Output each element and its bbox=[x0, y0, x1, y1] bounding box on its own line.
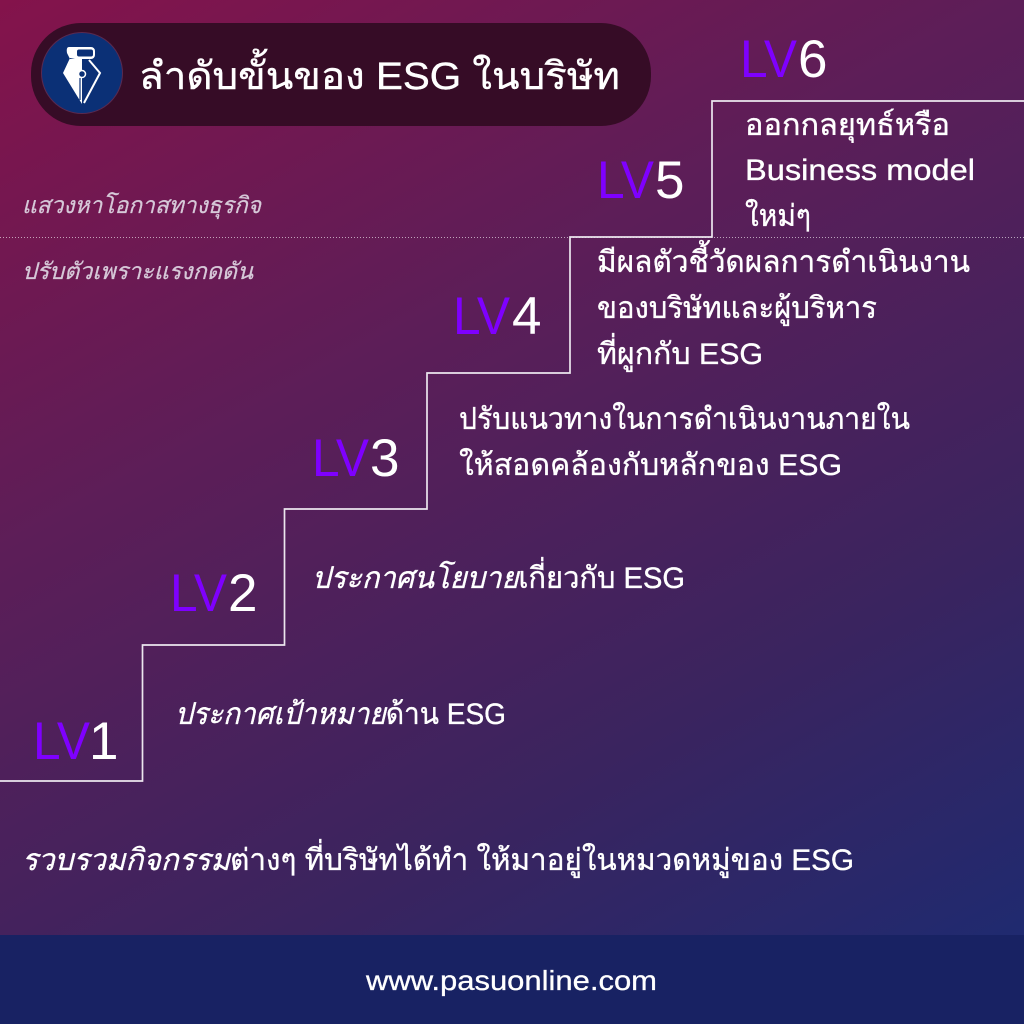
level 5 description: ที่ผูกกับ ESG bbox=[597, 333, 763, 372]
level 5 label bbox=[597, 151, 684, 210]
level 3 label bbox=[312, 429, 399, 488]
level 4 description bbox=[459, 402, 910, 482]
level 5 description: ของบริษัทและผู้บริหาร bbox=[597, 292, 877, 326]
level 6 label bbox=[740, 30, 827, 89]
footer bar bbox=[0, 935, 1024, 1024]
level 6 description bbox=[745, 108, 975, 233]
level 1 label: LV bbox=[33, 712, 91, 771]
level 6 description: ใหม่ๆ bbox=[745, 199, 811, 233]
level 4 description: ปรับแนวทางในการดำเนินงานภายใน bbox=[459, 402, 910, 436]
level 2 description: ประกาศเป้าหมายด้าน ESG bbox=[175, 698, 506, 731]
level 3 description: ประกาศนโยบายเกี่ยวกับ ESG bbox=[312, 557, 685, 595]
level 5 label: LV bbox=[597, 151, 655, 210]
level 6 label: 6 bbox=[798, 30, 827, 89]
icon: fountain pen nib logo bbox=[41, 32, 123, 114]
level 2 label: LV bbox=[170, 564, 228, 623]
level 3 label: LV bbox=[312, 429, 370, 488]
left label: adapting under pressure: ปรับตัวเพราะแรงกดดัน bbox=[22, 258, 254, 284]
level 4 description: ให้สอดคล้องกับหลักของ ESG bbox=[459, 448, 842, 482]
level 1 description: รวบรวมกิจกรรมต่างๆ ที่บริษัทได้ทำ ให้มาอยู่ในหมวดหมู่ของ ESG bbox=[22, 839, 854, 878]
level 5 description: มีผลตัวชี้วัดผลการดำเนินงาน bbox=[597, 240, 970, 279]
level 6 description: ออกกลยุทธ์หรือ bbox=[745, 108, 950, 144]
level 2 label: 2 bbox=[228, 564, 257, 623]
level 4 label: LV bbox=[453, 287, 511, 346]
title text: ลำดับขั้นของ ESG ในบริษัท bbox=[139, 48, 620, 98]
level 4 label bbox=[453, 287, 541, 346]
level 6 label: LV bbox=[740, 30, 798, 89]
level 6 description: Business model bbox=[745, 154, 975, 187]
staircase line bbox=[0, 101, 1024, 781]
level 5 description bbox=[597, 240, 970, 372]
dotted divider bbox=[0, 236, 1024, 238]
level 5 label: 5 bbox=[655, 151, 684, 210]
level 2 label bbox=[170, 564, 257, 623]
title banner bbox=[31, 23, 651, 126]
left label: seeking opportunity: แสวงหาโอกาสทางธุรกิจ bbox=[22, 192, 263, 219]
level 4 label: 4 bbox=[512, 287, 541, 346]
level 3 label: 3 bbox=[370, 429, 399, 488]
website url: www.pasuonline.com bbox=[365, 965, 657, 996]
level 1 label: 1 bbox=[89, 712, 118, 771]
